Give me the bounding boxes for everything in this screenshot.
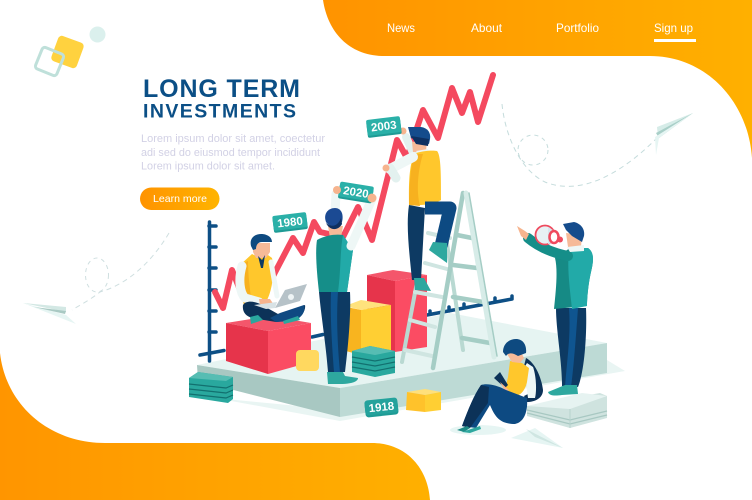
megaphone [536,226,563,244]
learn more button [140,188,220,210]
yellow bar [342,300,391,355]
label 2003 [366,116,402,138]
bottom left orange shape [0,353,430,500]
stepladder [402,193,497,368]
body text: Lorem ipsum dolor sit amet. [141,160,275,172]
man with megaphone [517,222,593,396]
body text [141,133,325,172]
paper plane left with dashed trail [23,233,169,324]
red box under seated man [226,316,311,374]
hands holding 2020 label [333,186,376,202]
learn more button: Learn more [153,193,207,205]
red line chart [215,75,493,308]
label 2020 [338,181,374,204]
label 2003: 2003 [370,119,397,135]
nav: Portfolio: Portfolio [556,21,599,35]
title [143,75,300,122]
title: INVESTMENTS [143,100,296,122]
platform [197,313,625,421]
top right orange header shape [323,0,752,158]
title: LONG TERM [143,75,300,103]
nav: Sign up: Sign up [654,21,693,35]
nav: Sign up [654,21,696,42]
money stack left [189,372,233,403]
paper plane bottom [511,428,563,448]
label 1980: 1980 [277,215,304,231]
tall red bar [367,270,427,352]
man on ladder [382,127,450,291]
navigation menu [387,21,696,42]
label 1980 [272,212,308,233]
label 2020: 2020 [342,185,369,201]
money stack middle [352,346,395,377]
nav: About: About [471,21,503,35]
yellow box front [406,389,441,412]
nav: News: News [387,21,415,35]
paper plane top right with dashed trail [502,104,693,186]
body text: Lorem ipsum dolor sit amet, coectetur [141,133,325,145]
paper stack [527,393,607,428]
laptop [254,284,307,309]
small yellow cube [296,350,319,371]
seated woman with tablet [450,339,543,435]
label 1918 [364,397,399,418]
seated man with laptop [238,234,307,324]
body text: adi sed do eiusmod tempor incididunt [141,147,320,159]
label 1918: 1918 [368,401,395,415]
chart axes [200,222,512,361]
standing man raising arms [316,194,372,384]
decorative logo icon [35,26,106,76]
